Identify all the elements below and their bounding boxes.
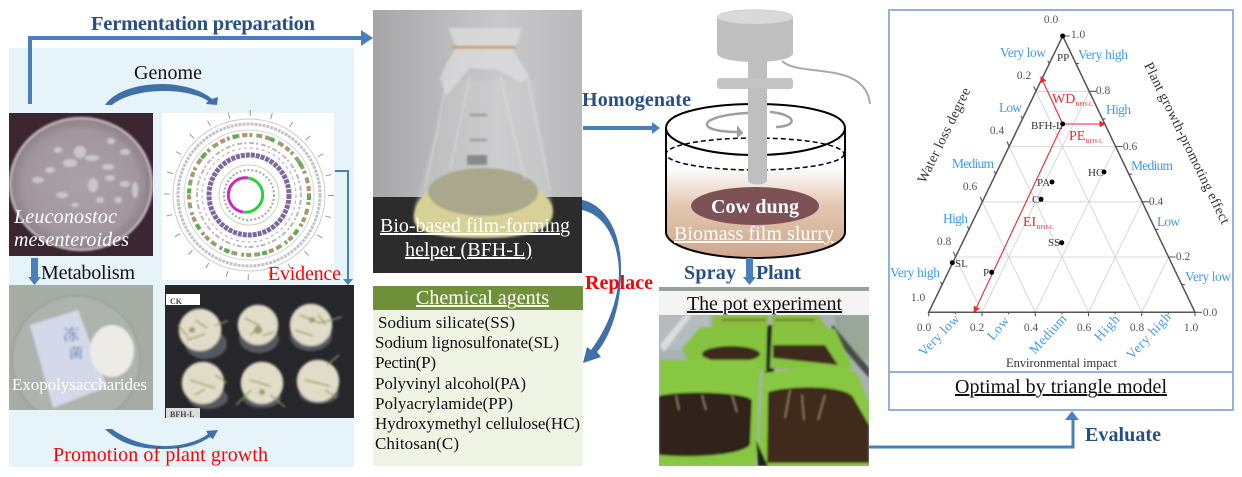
arrow: genome curve (105, 84, 218, 105)
axis numbers: 0.0 (1044, 14, 1058, 26)
arrow: homogenate (583, 122, 660, 134)
red model labels: BFH-L (1085, 139, 1103, 145)
panel: triangle model (889, 10, 1233, 410)
blue scale labels: Very low (1185, 269, 1231, 284)
blue scale labels: Very high (890, 265, 940, 280)
axis numbers: 1.0 (911, 292, 925, 304)
icon: homogenizer and beaker (666, 10, 870, 258)
icon: homogenizer and beaker: Biomass film slurry (674, 223, 834, 245)
panel: strain and genome background (9, 48, 354, 467)
heading: fermentation preparation: Fermentation preparation (91, 13, 316, 35)
axis numbers: 0.8 (1096, 85, 1110, 97)
axis numbers: 0.8 (1130, 322, 1144, 334)
photo: pot experiment (659, 287, 869, 466)
grid lines (956, 91, 1168, 312)
photo: exopolysaccharides (9, 285, 153, 410)
axis numbers: 0.2 (970, 322, 984, 334)
arrow head: fermentation preparation (361, 30, 373, 46)
blue scale labels: High (1091, 311, 1122, 344)
photo: exopolysaccharides: Exopolysaccharides (12, 375, 147, 394)
icon: homogenizer and beaker: Cow dung (711, 196, 799, 218)
blue scale labels: Very high (1123, 309, 1174, 362)
photo: flask of BFH-L (373, 10, 582, 273)
label: spray: Spray (684, 262, 736, 284)
red model labels: WD (1052, 92, 1075, 107)
data point labels: BFH-L (1031, 120, 1063, 132)
panel: chemical agents: Sodium silicate(SS) (378, 313, 515, 332)
photo: flask of BFH-L: helper (BFH-L) (405, 239, 532, 261)
photo: seedling plates: CK (170, 297, 183, 306)
arrow: evidence bracket (335, 171, 353, 285)
data points (950, 34, 1106, 275)
panel: chemical agents: Chemical agents (416, 287, 549, 309)
blue scale labels: Medium (1131, 158, 1173, 173)
data point labels: C (1032, 194, 1039, 206)
photo: pot experiment: The pot experiment (687, 293, 842, 315)
arrow: spray and plant (743, 258, 756, 285)
red model labels: PE (1069, 129, 1085, 144)
data point labels: SS (1048, 237, 1060, 249)
panel: chemical agents: Chitosan(C) (375, 434, 459, 453)
photo: petri dish Leuconostoc mesenteroides: Leuconostoc (13, 206, 117, 228)
red model labels: BFH-L (1036, 225, 1054, 231)
label: evaluate: Evaluate (1085, 424, 1161, 446)
blue scale labels: High (1106, 102, 1131, 117)
blue scale labels (890, 45, 1231, 362)
axis numbers: 0.4 (1024, 322, 1038, 334)
blue scale labels: Low (999, 100, 1022, 115)
red model labels (1023, 92, 1103, 231)
axis numbers: 0.6 (1123, 141, 1137, 153)
arrow: metabolism (28, 258, 41, 285)
label: metabolism: Metabolism (41, 262, 135, 284)
label: genome: Genome (134, 62, 202, 84)
red model labels: BFH-L (1075, 102, 1093, 108)
panel: chemical agents (373, 286, 583, 466)
axis titles: Environmental impact (1006, 356, 1118, 370)
chart: ternary plot (890, 14, 1232, 370)
label: evidence: Evidence (268, 263, 341, 285)
blue scale labels: High (943, 211, 968, 226)
panel: chemical agents: Hydroxymethyl cellulose(HC) (375, 414, 580, 433)
axis numbers: 0.6 (963, 181, 977, 193)
chart: circular genome map (162, 113, 334, 280)
axis numbers: 0.2 (1176, 251, 1190, 263)
axis titles: Plant growth-promoting effect (1140, 60, 1232, 227)
blue scale labels: Low (984, 313, 1012, 343)
label: promotion of plant growth: Promotion of plant growth (53, 444, 268, 466)
arrow: fermentation preparation (30, 38, 362, 104)
photo: seedling plates: BFH-L (170, 410, 194, 419)
tick marks (929, 36, 1202, 316)
photo: seedling plates (165, 285, 354, 419)
label: replace: Replace (585, 272, 653, 294)
red model arrows (974, 77, 1105, 312)
axis numbers: 1.0 (1184, 322, 1198, 334)
photo: petri dish Leuconostoc mesenteroides (9, 113, 153, 256)
axis numbers: 0.4 (1149, 196, 1163, 208)
photo: petri dish Leuconostoc mesenteroides: mesenteroides (14, 229, 129, 251)
panel: chemical agents: Polyvinyl alcohol(PA) (375, 374, 526, 393)
blue scale labels: Medium (1026, 311, 1070, 357)
arrow: replace curve (582, 200, 621, 363)
panel: chemical agents: Pectin(P) (375, 353, 436, 372)
axis numbers: 0.2 (1017, 70, 1031, 82)
blue scale labels: Very low (915, 311, 962, 359)
photo: flask of BFH-L: Bio-based film-forming (380, 215, 570, 237)
arrow: evaluate (869, 411, 1079, 447)
axis numbers: 0.0 (917, 322, 931, 334)
label: homogenate: Homogenate (582, 89, 691, 111)
blue scale labels: Very high (1078, 47, 1128, 62)
blue scale labels: Medium (952, 156, 994, 171)
axis numbers: 0.6 (1077, 322, 1091, 334)
blue scale labels: Low (1157, 214, 1180, 229)
triangle outline (929, 36, 1195, 312)
data point labels: SL (955, 258, 968, 270)
axis numbers: 1.0 (1071, 29, 1085, 41)
data point labels: HC (1088, 167, 1103, 179)
axis numbers: 0.0 (1203, 307, 1217, 319)
heading: optimal by triangle model: Optimal by triangle model (955, 376, 1167, 398)
panel: chemical agents: Polyacrylamide(PP) (375, 394, 513, 413)
data point labels (955, 52, 1103, 279)
arrow: promotion curve (105, 429, 218, 449)
label: plant: Plant (756, 262, 801, 284)
axis titles (915, 60, 1232, 370)
data point labels: P (983, 267, 989, 279)
axis numbers (911, 14, 1217, 334)
photo: exopolysaccharides: 菌 (69, 346, 83, 362)
red model labels: EI (1023, 215, 1036, 230)
axis titles: Water loss degree (915, 86, 974, 186)
data point labels: PP (1057, 52, 1069, 64)
data point labels: PA (1037, 177, 1050, 189)
blue scale labels: Very low (1000, 45, 1046, 60)
axis numbers: 0.4 (990, 125, 1004, 137)
photo: exopolysaccharides: 冻 (63, 326, 80, 344)
panel: chemical agents: Sodium lignosulfonate(SL) (375, 333, 559, 352)
axis numbers: 0.8 (937, 236, 951, 248)
